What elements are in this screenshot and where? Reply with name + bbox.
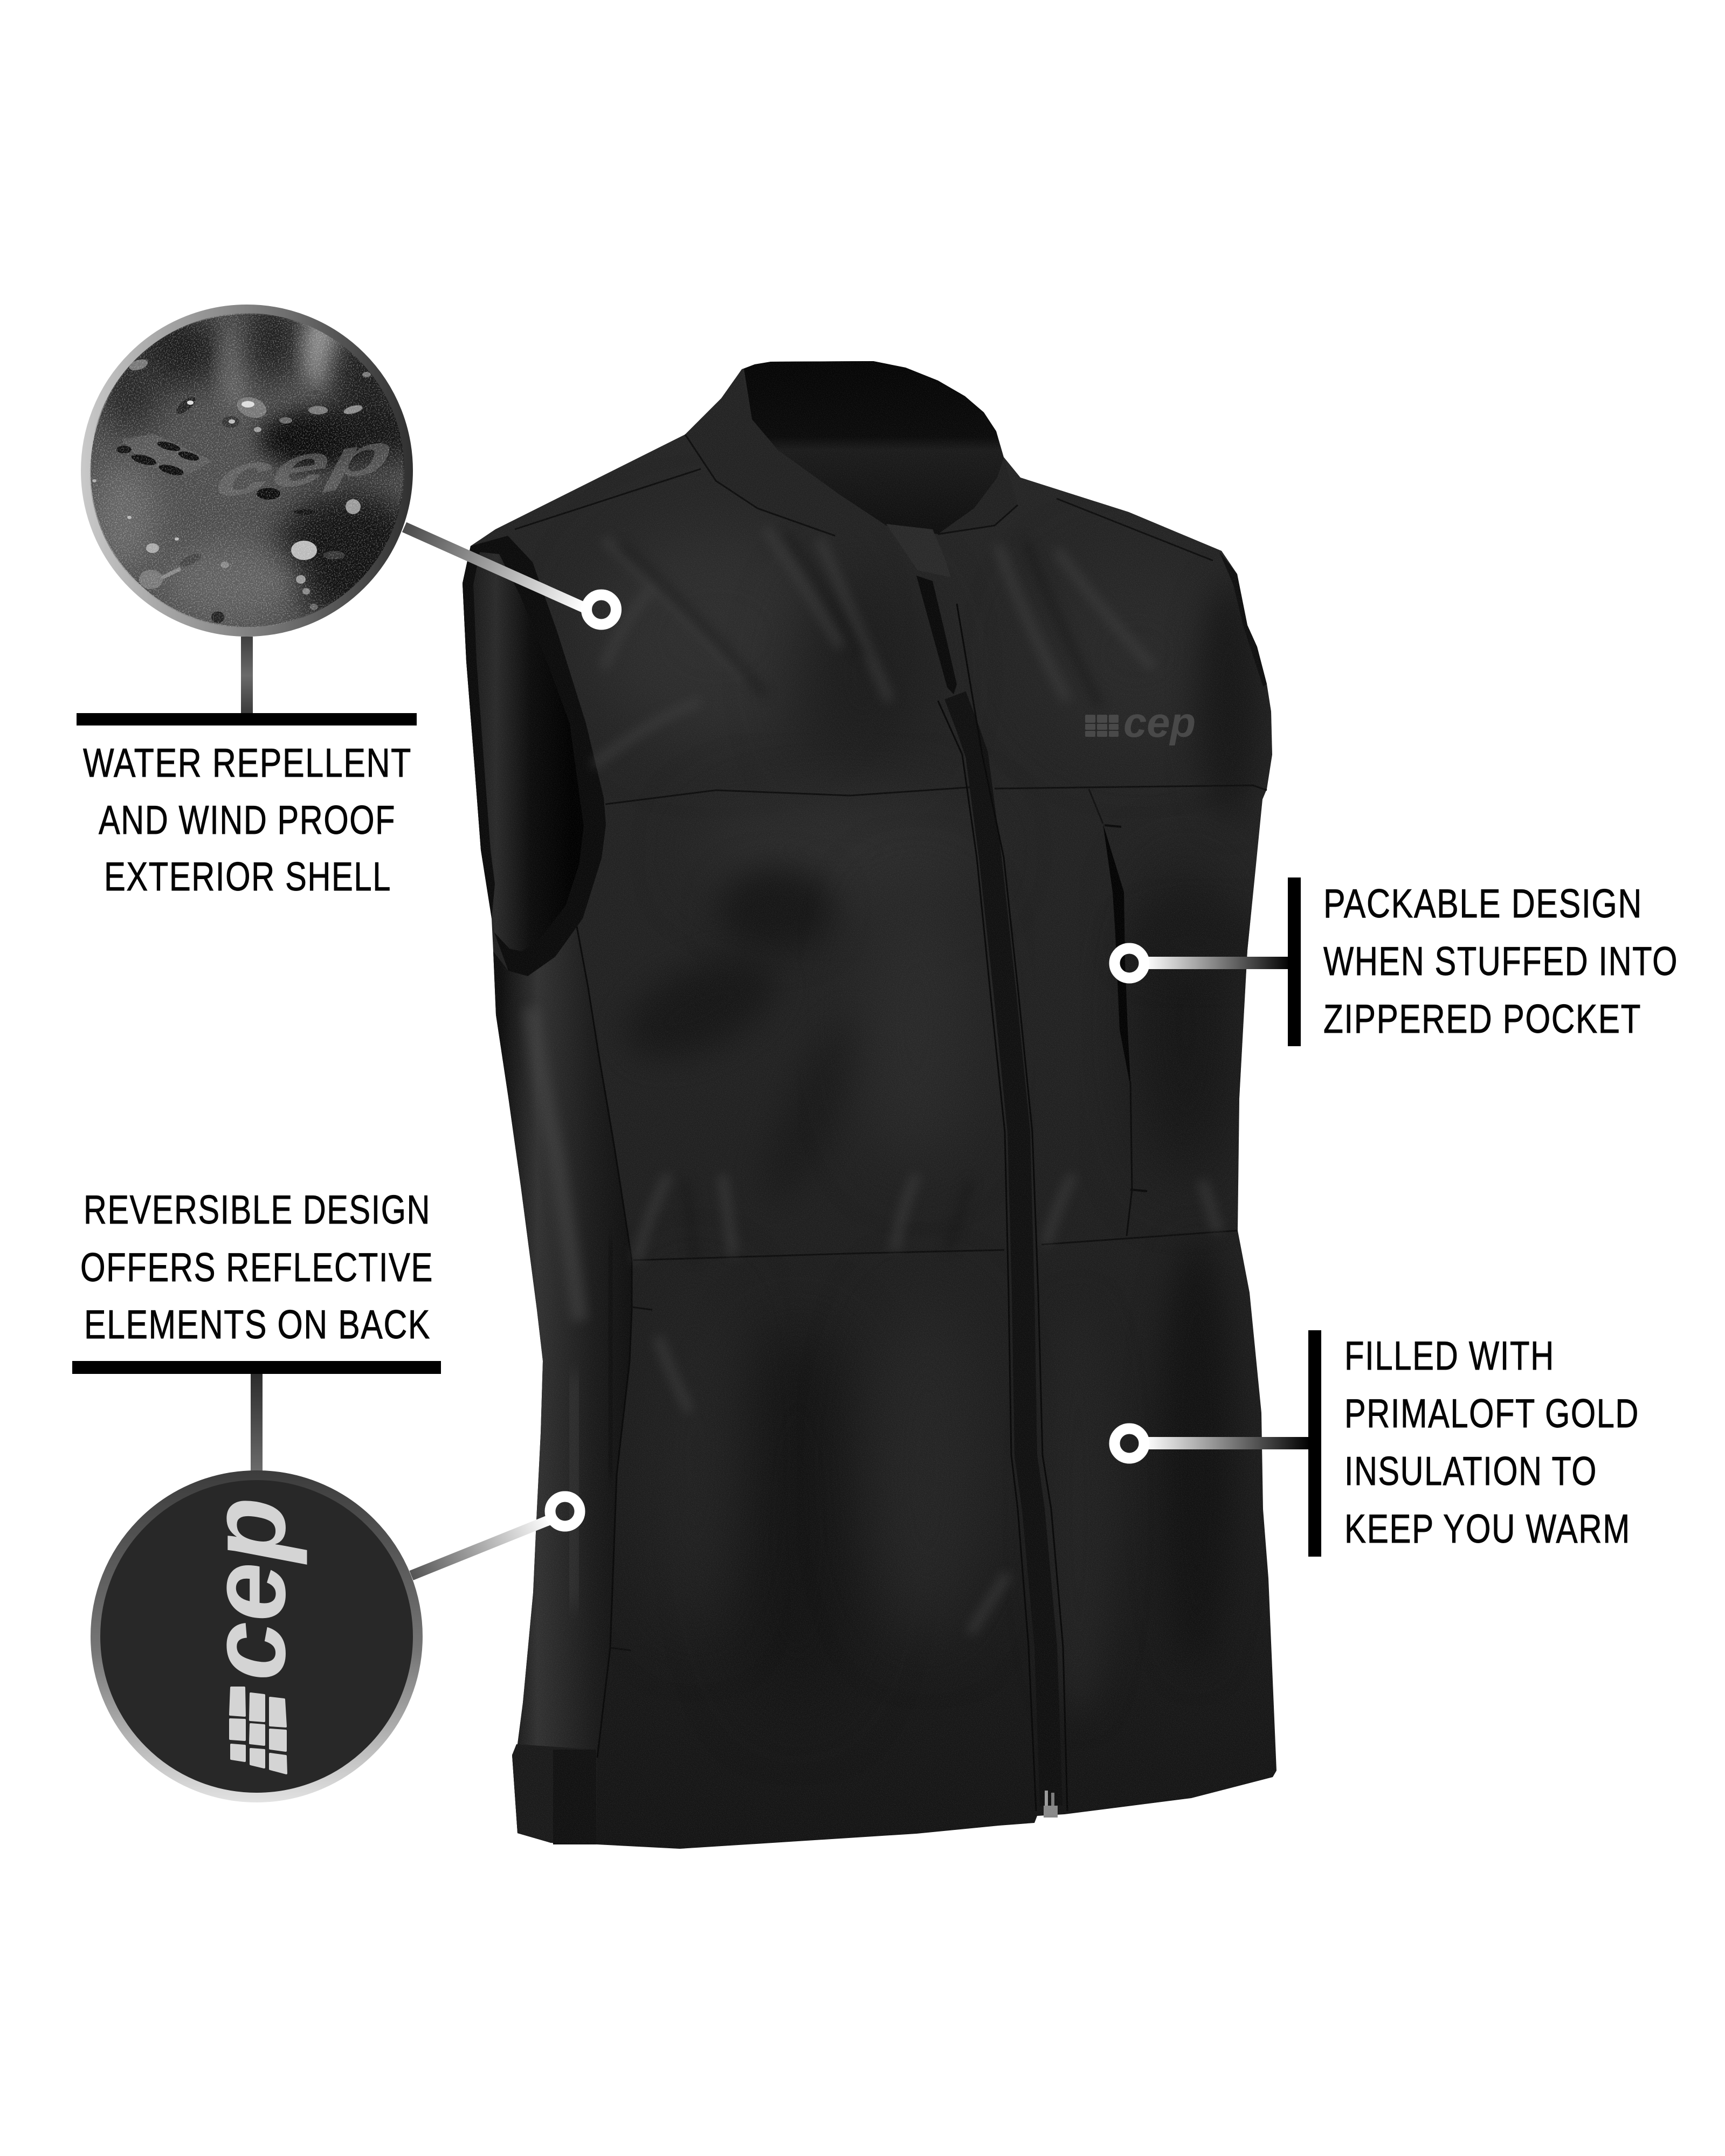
caption: REVERSIBLE DESIGN (84, 1187, 431, 1232)
rule (77, 713, 417, 725)
inset: reflective logo (95, 1475, 418, 1798)
marker dot (586, 595, 616, 624)
callout: primaloft insulation (1115, 1330, 1639, 1557)
water droplets (92, 357, 371, 623)
caption: EXTERIOR SHELL (104, 854, 391, 899)
caption: KEEP YOU WARM (1344, 1506, 1631, 1551)
caption (83, 740, 412, 899)
caption: FILLED WITH (1344, 1333, 1555, 1378)
callout: packable design (1115, 877, 1678, 1046)
side cuff (512, 1744, 596, 1844)
armhole binding (471, 536, 606, 976)
logo letters: cep (188, 1497, 308, 1681)
caption: ELEMENTS ON BACK (84, 1302, 431, 1347)
photo logo (121, 420, 398, 510)
chest logo (1085, 699, 1196, 746)
fabric shading (593, 528, 1267, 1714)
rule (72, 1361, 441, 1374)
caption (1344, 1333, 1639, 1551)
callout: reversible design (72, 1187, 580, 1798)
caption: PACKABLE DESIGN (1323, 881, 1643, 926)
front zipper (955, 695, 1051, 1806)
vertical rule (1288, 877, 1301, 1046)
side panel sheen (531, 1008, 612, 1606)
side panel (493, 927, 632, 1844)
stem (251, 1374, 263, 1471)
caption: ZIPPERED POCKET (1323, 996, 1641, 1041)
marker dot (1115, 1428, 1144, 1459)
fabric speckle (86, 310, 408, 631)
fabric grain (458, 356, 1283, 1854)
inset photo: water droplets on fabric (86, 294, 431, 632)
fabric wrinkles dark (620, 534, 1100, 1261)
fabric wrinkles light (593, 528, 1218, 1633)
photo logo: cep (211, 420, 398, 510)
armhole outer hem (463, 546, 495, 918)
collar interior (744, 361, 1004, 534)
caption: INSULATION TO (1344, 1448, 1597, 1494)
logo grid (230, 1688, 286, 1773)
vertical rule (1308, 1330, 1321, 1557)
caption: PRIMALOFT GOLD (1344, 1391, 1639, 1436)
connector (1146, 1437, 1310, 1449)
left collar front (685, 371, 886, 536)
caption (80, 1187, 433, 1347)
marker dot (550, 1496, 580, 1526)
vest silhouette (463, 361, 1276, 1849)
caption (1323, 881, 1678, 1041)
caption: AND WIND PROOF (99, 797, 396, 842)
right armhole trim (1219, 552, 1267, 687)
connector to shoulder (404, 527, 584, 607)
zipper pull (916, 576, 957, 694)
zipper slider (1044, 1791, 1058, 1818)
caption: OFFERS REFLECTIVE (80, 1245, 433, 1290)
right collar front (938, 458, 1018, 534)
caption: WATER REPELLENT (83, 740, 412, 785)
connector (1146, 957, 1291, 969)
stem (241, 637, 253, 714)
marker dot (1115, 949, 1144, 978)
armhole lining (463, 546, 584, 951)
chest pocket slit (1089, 789, 1147, 1236)
zipper flap edges (938, 604, 1067, 1811)
vest product photo (458, 356, 1283, 1854)
connector to hem (411, 1520, 549, 1575)
vest seams (515, 434, 1267, 1758)
callout: water repellent shell (77, 294, 616, 899)
zipper tab placket (886, 524, 951, 577)
chest logo: cep (1123, 699, 1196, 746)
